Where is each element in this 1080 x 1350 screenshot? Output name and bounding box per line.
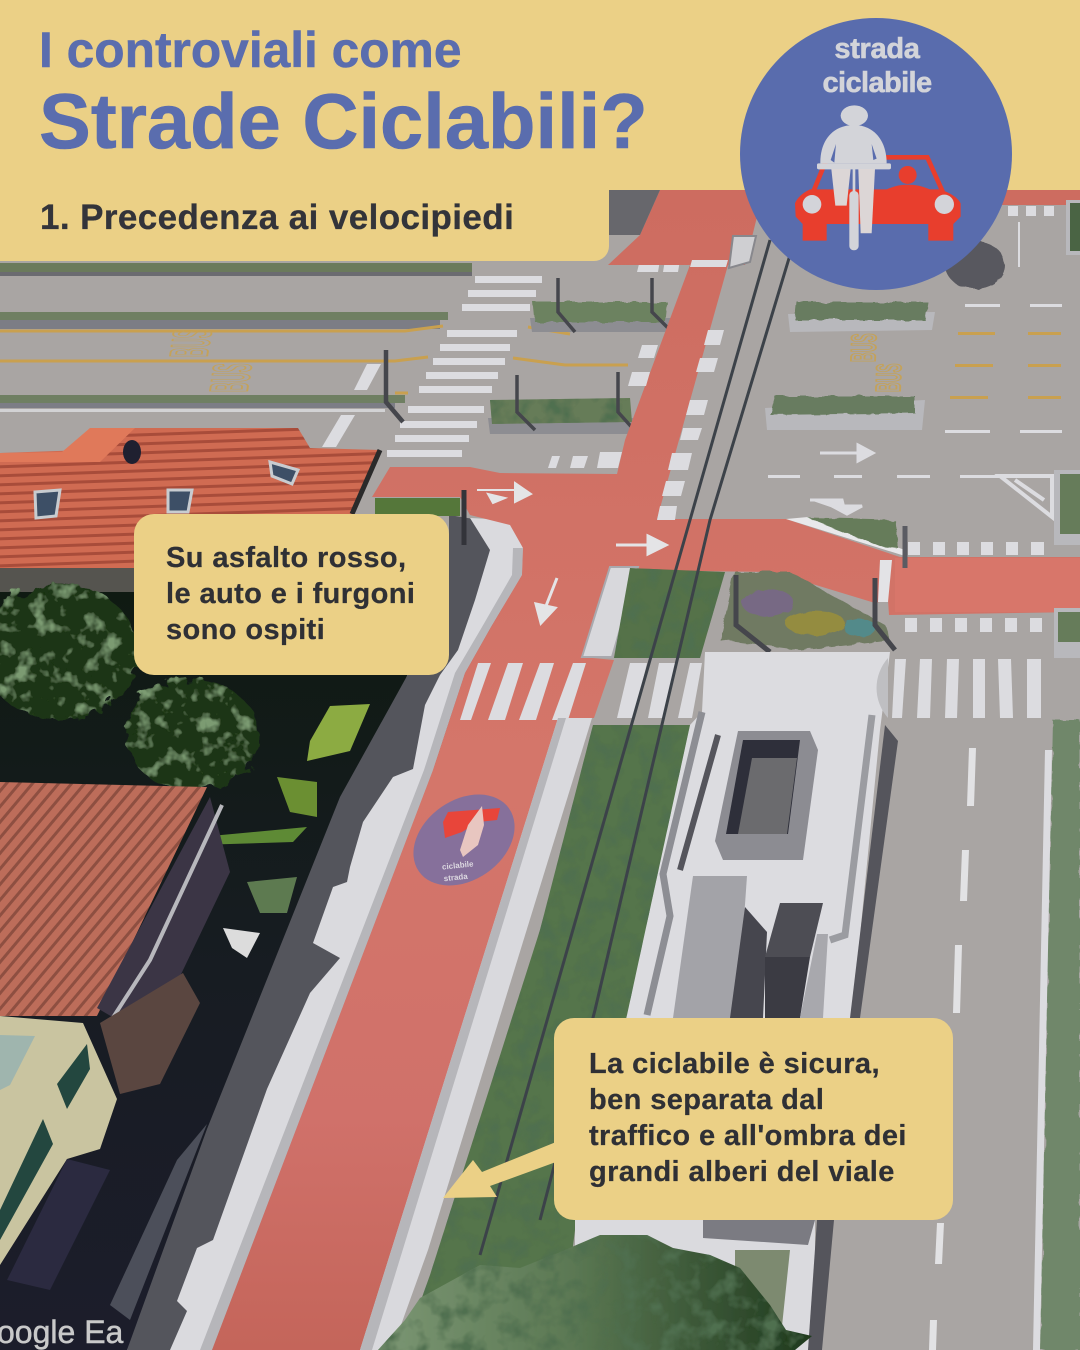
callout text: La ciclabile è sicura, (589, 1048, 880, 1080)
panel: aerial view left side, gardens and houses (0, 568, 449, 1350)
skylights (35, 490, 60, 518)
orange lines (0, 326, 628, 393)
hedge (307, 704, 370, 761)
callout text: ben separata dal (589, 1084, 824, 1116)
dark wing (97, 797, 230, 1039)
right rail dark (850, 725, 898, 1018)
traffic island 2 (488, 372, 638, 434)
tiny sign text: ciclabile (442, 859, 474, 872)
plaza platform (625, 652, 898, 1018)
lane dashes (929, 748, 976, 1350)
top-right road details (608, 190, 1054, 289)
callout: red asphalt (134, 514, 449, 675)
lawn (277, 777, 317, 817)
callout text (589, 1048, 907, 1188)
bus road marking right: BUS (868, 364, 909, 392)
title line 1: I controviali come (39, 22, 461, 78)
white dashes beside vertical lane (628, 260, 728, 520)
signal pole (902, 526, 908, 568)
garden strip (197, 827, 307, 845)
arrow split (477, 483, 531, 503)
tiny sign text: strada (443, 872, 469, 883)
arrow from callout to lane (443, 1142, 556, 1198)
road marks right (768, 304, 1062, 517)
bus road marking: BUS (199, 364, 264, 392)
plaza circle (877, 658, 888, 718)
title line 2: Strade Ciclabili? (39, 79, 648, 165)
right-side small island (808, 518, 905, 568)
green strip with grass (360, 718, 690, 1350)
arrow down (536, 578, 557, 623)
road sign: strada ciclabile (740, 18, 1012, 290)
top-left dark curb (608, 190, 660, 235)
sign label 2: ciclabile (822, 67, 932, 99)
white dashes (768, 304, 1062, 478)
bush (247, 877, 297, 913)
hedge behind callout (375, 498, 460, 516)
tree shadow (945, 241, 1005, 289)
signal poles (736, 575, 895, 652)
roof: lower house (0, 782, 207, 1016)
signal pole (558, 278, 672, 332)
traffic island 3 right (788, 302, 935, 332)
chimney (123, 440, 141, 464)
right rail grey (830, 715, 872, 940)
yield triangle (1000, 476, 1052, 517)
strip curb near lane (582, 567, 638, 657)
stop lines (354, 364, 381, 390)
planter pit (715, 731, 818, 860)
sidewalk edge (200, 548, 523, 1350)
small curb (729, 236, 756, 268)
watermark: oogle Ea (0, 1314, 124, 1350)
top grey crossing area lines (0, 263, 909, 447)
crosswalk right (892, 659, 1041, 718)
signal pole centre (386, 350, 403, 422)
cream wall (0, 1016, 117, 1265)
green bed (614, 568, 725, 658)
skylight (270, 462, 298, 484)
signal pole (517, 372, 636, 432)
skylight (168, 490, 192, 512)
dark pavement (127, 515, 523, 1350)
white edge line (1033, 750, 1052, 1350)
sign car (443, 808, 500, 838)
callout text (166, 542, 415, 646)
dark roof (7, 1159, 110, 1290)
main lane and crossings (212, 190, 1080, 1350)
median 2 (0, 312, 448, 320)
fence (110, 1124, 207, 1320)
garden highlight (223, 928, 260, 958)
header panel (0, 0, 1080, 261)
callout text: sono ospiti (166, 614, 325, 646)
pedestrian squares (1008, 206, 1018, 216)
right side islands (1054, 200, 1080, 658)
arrows on red (477, 483, 666, 623)
callout text: Su asfalto rosso, (166, 542, 406, 574)
traffic island 4 right (765, 396, 925, 430)
left rail (647, 712, 702, 1015)
callout text: grandi alberi del viale (589, 1156, 895, 1188)
callout: safe lane (554, 1018, 953, 1220)
arrow right (616, 536, 666, 554)
curb triangle (786, 517, 905, 556)
gutter (105, 805, 222, 1030)
pedestrian dashes right (905, 542, 1044, 632)
traffic island 1 (530, 278, 672, 332)
lane white line (0, 409, 385, 412)
crossing bar (878, 560, 892, 602)
yellow dashes (950, 332, 1061, 399)
crosswalk stripes on red (460, 663, 586, 720)
callout text: traffico e all'ombra dei (589, 1120, 907, 1152)
bus road marking right: BUS (843, 334, 884, 362)
arrow turning (810, 500, 862, 514)
lower platform behind tree (575, 1220, 834, 1350)
sign label: strada (834, 33, 921, 65)
curb right of lane (360, 718, 592, 1350)
right road (929, 720, 1080, 1350)
icon: cyclist (817, 105, 891, 250)
title (39, 22, 648, 165)
fence dark left (680, 735, 718, 870)
red cycle paths (212, 190, 1080, 1350)
subtitle: 1. Precedenza ai velocipiedi (40, 198, 514, 237)
window skylight (0, 1035, 35, 1090)
lines (1018, 222, 1020, 267)
light sidewalk band (170, 518, 523, 1350)
crosswalk left (387, 260, 680, 468)
median top (0, 263, 472, 272)
road marking: painted sign on lane (396, 776, 532, 904)
callout text: le auto e i furgoni (166, 578, 415, 610)
flower bed (720, 572, 895, 652)
right branch lighter (895, 558, 1080, 612)
dark pole near curb (462, 490, 466, 545)
crosswalk centre (617, 663, 702, 718)
icon: car (795, 157, 961, 241)
roof: upper house (0, 428, 380, 568)
green verge (1040, 720, 1080, 1350)
tram lines (480, 240, 790, 1255)
trees (0, 584, 258, 791)
arrow (820, 445, 873, 461)
stop line (322, 415, 355, 447)
bus road marking: BUS (159, 330, 224, 357)
brown wing (100, 973, 200, 1094)
windows (57, 1044, 90, 1109)
stair blocks (673, 876, 828, 1018)
tree foreground (378, 1235, 812, 1350)
median 3 (0, 395, 405, 403)
window lower (0, 1119, 53, 1240)
sign cyclist (460, 806, 484, 857)
